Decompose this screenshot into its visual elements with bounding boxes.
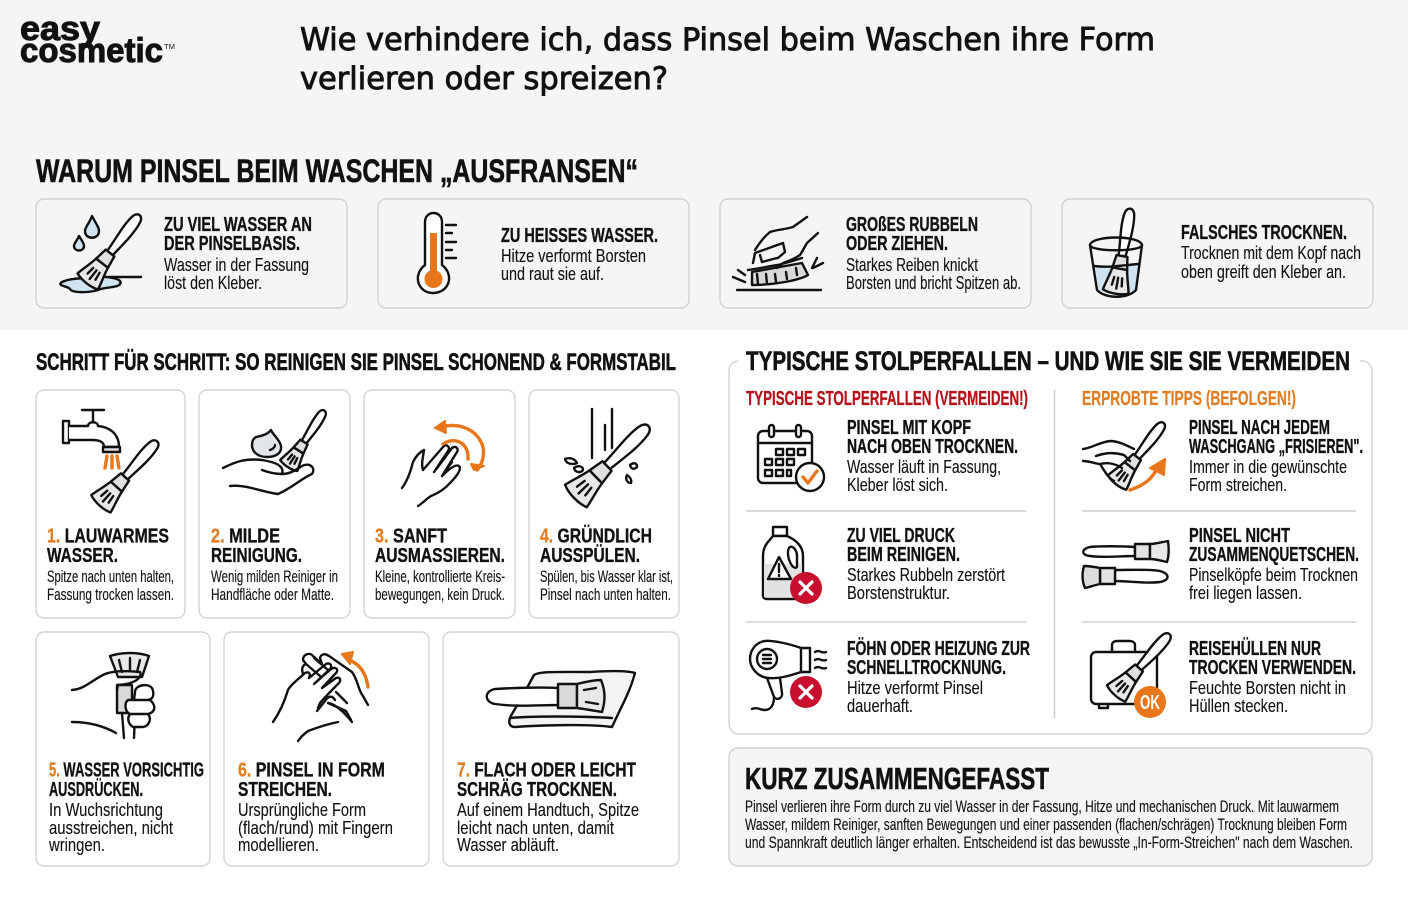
text: step 4: Pinsel nach unten halten. [540, 586, 671, 604]
text: NACH OBEN TROCKNEN. [847, 436, 1018, 458]
text [1189, 637, 1356, 716]
icon: hair dryer [750, 641, 826, 710]
icon: hand with foam and brush [223, 405, 333, 494]
text: grobes rubbeln: Starkes Reiben knickt [846, 255, 978, 275]
text: step 3: bewegungen, kein Druck. [375, 586, 505, 604]
text: falsches trocknen: FALSCHES TROCKNEN. [1181, 222, 1347, 244]
text: zu heisses wasser [501, 225, 658, 284]
text: PINSEL NACH JEDEM [1189, 417, 1330, 439]
icon: brush in glass of water [1090, 206, 1143, 297]
item: zu viel druck [763, 525, 1005, 604]
text: ZU VIEL DRUCK [847, 525, 955, 547]
text: Pinselköpfe beim Trocknen [1189, 565, 1358, 585]
icon: calendar with check [758, 425, 824, 491]
text: step 2: Handfläche oder Matte. [211, 586, 334, 604]
text: summary [745, 798, 1353, 852]
icon: brush on towel [487, 671, 635, 727]
text: grobes rubbeln: Borsten und bricht Spitzen ab. [846, 273, 1021, 293]
text: zu viel wasser [164, 214, 312, 293]
text: step 4 [540, 524, 673, 604]
text: step 4: Spülen, bis Wasser klar ist, [540, 568, 673, 586]
icon: thermometer [418, 213, 456, 293]
logo: easy cosmetic: TM [164, 44, 175, 51]
text [847, 417, 1018, 495]
text: BEIM REINIGEN. [847, 544, 960, 566]
text: step 2: REINIGUNG. [211, 545, 302, 567]
text: PINSEL MIT KOPF [847, 417, 971, 439]
text: Hitze verformt Pinsel [847, 678, 983, 698]
icon: hand stroking brush [1083, 416, 1173, 491]
panel: zu viel wasser [36, 199, 347, 308]
icon: suitcase with brush: OK [1140, 692, 1160, 714]
text: step 1 [47, 526, 174, 604]
panel: stolperfallen [729, 346, 1372, 734]
title: verlieren oder spreizen? [300, 61, 668, 97]
text: step 6: modellieren. [238, 835, 319, 855]
text: step 3: AUSMASSIEREN. [375, 545, 505, 567]
item: frisieren [1083, 416, 1363, 495]
panel: zu heisses wasser [378, 199, 689, 308]
item: reisehuellen [1091, 626, 1356, 718]
text: step 6: STREICHEN. [238, 779, 332, 801]
text: step 5: 5. WASSER VORSICHTIG [49, 760, 204, 782]
text: step 6: 6. PINSEL IN FORM [238, 760, 385, 782]
text: step 2: 2. MILDE [211, 526, 280, 548]
logo: easy cosmetic [20, 10, 175, 70]
text: zu viel wasser: Wasser in der Fassung [164, 255, 309, 275]
text: Feuchte Borsten nicht in [1189, 678, 1346, 698]
panel: step 2 [199, 390, 350, 618]
logo: easy cosmetic: easy [20, 10, 100, 48]
text: zu heisses wasser: Hitze verformt Borsten [501, 246, 646, 266]
icon: hands shaping brush with arrow [273, 652, 368, 741]
text: step 7 [457, 760, 639, 855]
text: step 1: WASSER. [47, 545, 118, 567]
text: Borstenstruktur. [847, 583, 950, 603]
text: step 5: ausstreichen, nicht [49, 818, 173, 838]
text: dauerhaft. [847, 696, 913, 716]
text: frei liegen lassen. [1189, 583, 1302, 603]
text: step 1: Spitze nach unten halten, [47, 568, 174, 586]
text: step 4: 4. GRÜNDLICH [540, 524, 652, 548]
icon: brush in puddle [60, 207, 150, 292]
text: step 3: 3. SANFT [375, 526, 447, 548]
text [847, 525, 1005, 603]
text: grobes rubbeln [846, 214, 1021, 293]
text: step 5: wringen. [48, 835, 105, 855]
panel: kurz zusammengefasst [729, 748, 1372, 866]
text: SCHNELLTROCKNUNG. [847, 657, 1006, 679]
panel: grobes rubbeln [720, 199, 1031, 308]
text [1189, 417, 1363, 495]
item: nicht zusammenquetschen [1083, 525, 1359, 603]
text: zu viel wasser: löst den Kleber. [164, 273, 262, 293]
text: grobes rubbeln: ODER ZIEHEN. [846, 233, 948, 255]
text: step 5 [48, 760, 204, 855]
icon: bottle with warning [763, 527, 822, 604]
item: kopf nach oben [758, 417, 1018, 495]
icon: hand squeezing brush [72, 653, 154, 738]
text: step 3: Kleine, kontrollierte Kreis- [375, 568, 505, 586]
text: Kleber löst sich. [847, 475, 948, 495]
text: Wasser läuft in Fassung, [847, 457, 1001, 477]
text: Immer in die gewünschte [1189, 457, 1347, 477]
panel: step 3 [364, 390, 515, 618]
panel: step 5 [36, 632, 210, 866]
panel: step 7 [443, 632, 679, 866]
text: REISEHÜLLEN NUR [1189, 637, 1321, 660]
text: Starkes Rubbeln zerstört [847, 565, 1005, 585]
subheading: tipps: ERPROBTE TIPPS (BEFOLGEN!) [1082, 388, 1296, 410]
text: zu viel wasser: DER PINSELBASIS. [164, 233, 300, 255]
title: Wie verhindere ich, dass Pinsel beim Waschen ihre Form [300, 22, 1155, 58]
subheading: vermeiden: TYPISCHE STOLPERFALLEN (VERMEIDEN!) [746, 388, 1028, 410]
text: step 7: 7. FLACH ODER LEICHT [457, 760, 636, 782]
text: step 5: In Wuchsrichtung [49, 800, 163, 820]
title [300, 22, 1155, 97]
text: step 5: AUSDRÜCKEN. [49, 778, 143, 801]
panel: falsches trocknen [1062, 199, 1373, 308]
icon: two brushes [1083, 541, 1169, 588]
icon: brush rinsing [563, 409, 659, 509]
icon: hand scrubbing with brush [733, 217, 823, 290]
text: grobes rubbeln: GROßES RUBBELN [846, 214, 978, 236]
item: foehn [750, 637, 1030, 716]
panel: step 6 [224, 632, 429, 866]
icon: tap with brush [63, 410, 167, 514]
text: step 6: Ursprüngliche Form [238, 800, 366, 820]
text: falsches trocknen: Trocknen mit dem Kopf nach [1181, 243, 1361, 263]
icon: hand massaging with arrows [402, 421, 484, 506]
text: Form streichen. [1189, 475, 1287, 495]
text: step 2 [211, 526, 338, 604]
text [847, 637, 1030, 716]
heading: warum pinsel ausfransen: WARUM PINSEL BEIM WASCHEN „AUSFRANSEN“ [36, 153, 638, 189]
text: falsches trocknen [1181, 222, 1361, 282]
text: Hüllen stecken. [1189, 696, 1288, 716]
icon: suitcase with brush [1091, 626, 1179, 718]
text: zu heisses wasser: und raut sie auf. [501, 264, 604, 284]
heading: schritt fuer schritt: SCHRITT FÜR SCHRITT: SO REINIGEN SIE PINSEL SCHONEND & FORMSTABIL [36, 349, 676, 376]
text: FÖHN ODER HEIZUNG ZUR [847, 637, 1030, 660]
text: zu heisses wasser: ZU HEISSES WASSER. [501, 225, 658, 247]
text: step 7: leicht nach unten, damit [457, 818, 614, 838]
text: step 6: (flach/rund) mit Fingern [238, 818, 393, 838]
text: step 1: 1. LAUWARMES [47, 526, 169, 548]
text: step 7: Auf einem Handtuch, Spitze [457, 800, 639, 820]
text: step 6 [238, 760, 393, 855]
text: falsches trocknen: oben greift den Kleber an. [1181, 262, 1346, 282]
panel: step 1 [36, 390, 185, 618]
text: step 7: Wasser abläuft. [457, 835, 559, 855]
text: zu viel wasser: ZU VIEL WASSER AN [164, 214, 312, 236]
heading: kurz zusammengefasst: KURZ ZUSAMMENGEFASST [745, 761, 1049, 796]
logo: easy cosmetic: cosmetic [20, 32, 163, 70]
text: step 4: AUSSPÜLEN. [540, 544, 640, 567]
text: step 7: SCHRÄG TROCKNEN. [457, 778, 617, 801]
text: step 2: Wenig milden Reiniger in [211, 568, 338, 586]
text: PINSEL NICHT [1189, 525, 1290, 547]
text: step 1: Fassung trocken lassen. [47, 586, 174, 604]
panel: step 4 [529, 390, 679, 618]
text: step 3 [375, 526, 505, 604]
text [1189, 525, 1359, 603]
